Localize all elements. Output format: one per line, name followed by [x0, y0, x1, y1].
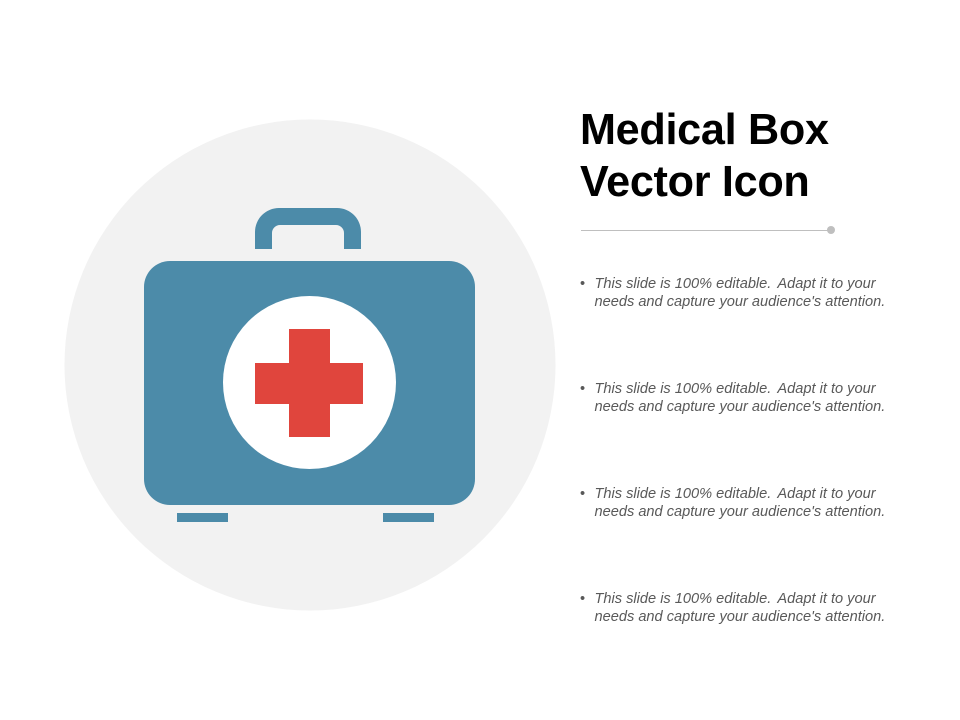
bullet text 2: needs and capture your audience's attention. — [594, 399, 885, 415]
bullet text 3: needs and capture your audience's attention. — [594, 504, 885, 520]
bullet text 1 — [580, 276, 885, 310]
bullet text 2 — [580, 381, 885, 415]
bullet text 4 — [580, 591, 885, 625]
background circle — [64, 120, 556, 610]
medical box illustration — [64, 120, 556, 610]
box handle — [255, 208, 361, 249]
white circle — [223, 296, 396, 469]
title — [580, 106, 829, 206]
bullet text 3: • — [580, 486, 585, 502]
bullet text 4: This slide is 100% editable. Adapt it to your — [594, 591, 876, 607]
box body — [144, 261, 475, 505]
title: Medical Box — [580, 106, 829, 154]
red cross — [255, 329, 363, 437]
bullet text 4: • — [580, 591, 585, 607]
bullet text 3 — [580, 486, 885, 520]
bullet text 2: This slide is 100% editable. Adapt it to your — [594, 381, 876, 397]
bullet text 3: This slide is 100% editable. Adapt it to your — [594, 486, 876, 502]
right foot — [383, 513, 434, 522]
bullet text 1: needs and capture your audience's attention. — [594, 294, 885, 310]
bullet text 1: This slide is 100% editable. Adapt it to your — [594, 276, 876, 292]
title: Vector Icon — [580, 158, 810, 206]
bullet text 2: • — [580, 381, 585, 397]
divider with dot — [581, 226, 835, 234]
icon: medical box — [144, 208, 475, 522]
left foot — [177, 513, 228, 522]
bullet text 1: • — [580, 276, 585, 292]
bullet text 4: needs and capture your audience's attention. — [594, 609, 885, 625]
